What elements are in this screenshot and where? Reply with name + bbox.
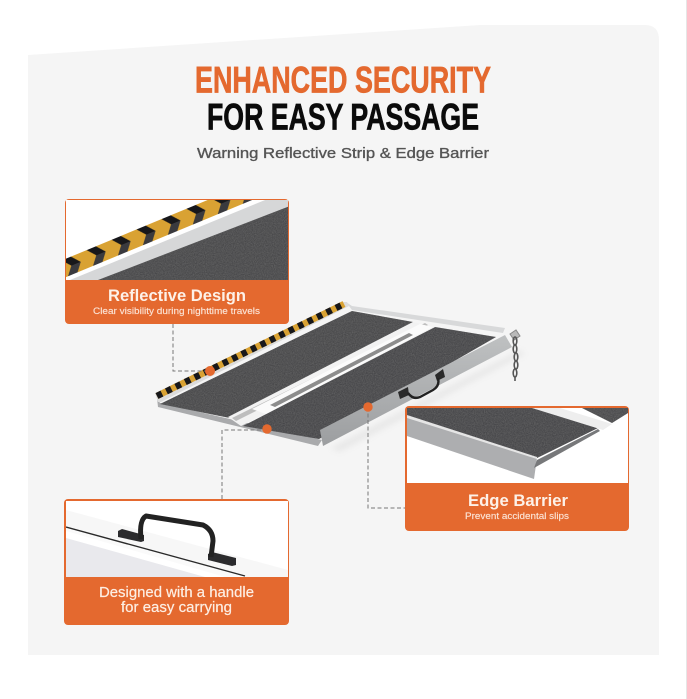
caption: Clear visibility during nighttime travels	[93, 306, 260, 317]
heading: Reflective Design	[108, 286, 246, 305]
connector: reflective design	[173, 324, 205, 371]
ramp center hinge	[228, 322, 435, 426]
ramp side barrier	[320, 335, 512, 446]
subtitle: Warning Reflective Strip & Edge Barrier	[197, 146, 489, 162]
ramp bottom edge	[157, 398, 322, 446]
ramp far frame	[346, 302, 505, 333]
title: ENHANCED SECURITY	[195, 60, 491, 100]
ramp left mat	[160, 311, 413, 418]
reflective strip	[155, 302, 349, 402]
title	[195, 60, 491, 138]
caption	[99, 585, 254, 616]
ramp right mat	[243, 327, 496, 439]
panel: edge barrier	[405, 406, 629, 531]
title: FOR EASY PASSAGE	[207, 96, 479, 138]
panel: handle	[64, 499, 289, 625]
caption: for easy carrying	[121, 600, 232, 616]
ramp handle	[398, 369, 445, 399]
marker dot: barrier	[363, 402, 373, 412]
photo: handle close-up	[66, 501, 288, 577]
marker dot: handle	[262, 424, 272, 434]
photo: reflective strip close-up	[66, 200, 288, 280]
marker dot: strip	[205, 366, 215, 376]
photo: edge barrier close-up	[407, 408, 628, 483]
ramp product illustration	[155, 302, 525, 452]
ramp chain	[510, 330, 520, 381]
handle icon	[118, 516, 236, 566]
caption: Prevent accidental slips	[465, 511, 569, 522]
panel: reflective design	[65, 199, 289, 324]
heading: Edge Barrier	[468, 491, 568, 510]
connector: edge barrier	[368, 407, 405, 508]
caption: Designed with a handle	[99, 585, 254, 601]
connector: handle	[222, 430, 262, 499]
